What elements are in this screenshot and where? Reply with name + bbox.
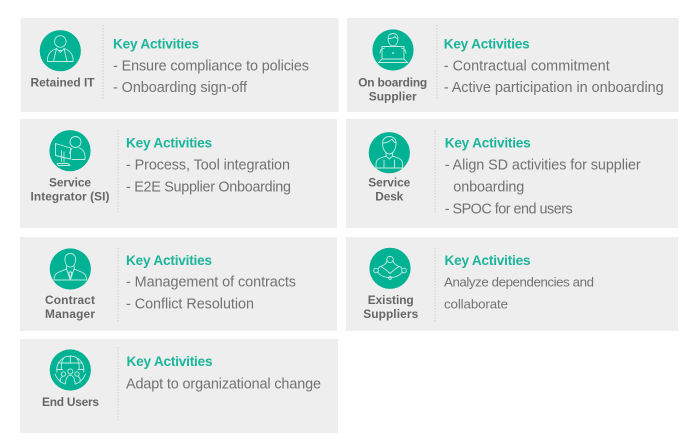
- icon: globe with users: [50, 349, 91, 391]
- label: Existing Suppliers: Suppliers: [363, 307, 419, 321]
- label: Service Integrator (SI): [30, 176, 110, 204]
- panel: Contract Manager: [20, 237, 337, 331]
- icon: person in suit: [50, 248, 91, 290]
- icon: retained IT person: [40, 30, 81, 71]
- text: activities: Analyze dependencies and: [444, 275, 594, 290]
- heading: Key Activities: Key Activities: [445, 135, 531, 150]
- label: Contract Manager: Manager: [45, 307, 95, 321]
- label: On boarding Supplier: Supplier: [369, 90, 417, 104]
- text: activities: - Contractual commitment: [444, 58, 610, 74]
- text: activities: - E2E Supplier Onboarding: [126, 179, 291, 195]
- label: Existing Suppliers: [363, 293, 419, 321]
- label: Service Desk: Desk: [375, 190, 404, 204]
- panel: On boarding Supplier: [347, 18, 678, 112]
- text: activities: [126, 275, 296, 312]
- text: activities: - Active participation in onboarding: [444, 80, 664, 96]
- text: activities: onboarding: [453, 179, 524, 195]
- label: Contract Manager: [45, 293, 95, 321]
- text: activities: [126, 158, 291, 195]
- panel: Service Integrator: [20, 119, 337, 228]
- text: activities: - Ensure compliance to policies: [113, 58, 309, 74]
- panel: Existing Suppliers: [346, 237, 678, 331]
- heading: Key Activities: Key Activities: [444, 253, 530, 268]
- panel: End Users: [20, 339, 338, 433]
- icon: service desk agent: [369, 132, 410, 173]
- heading: Key Activities: Key Activities: [126, 253, 212, 268]
- label: Contract Manager: Contract: [45, 293, 95, 307]
- icon: person with laptop: [372, 29, 414, 71]
- label: Service Desk: Service: [368, 176, 411, 190]
- text: activities: - Onboarding sign-off: [113, 80, 248, 96]
- icon: person at monitor: [49, 130, 91, 171]
- icon: connected supplier network: [369, 248, 411, 289]
- heading: Key Activities: Key Activities: [113, 36, 199, 51]
- text: activities: [445, 158, 641, 217]
- text: activities: [444, 275, 594, 311]
- text: activities: - SPOC for end users: [445, 201, 573, 217]
- text: activities: collaborate: [444, 296, 508, 311]
- panel: Retained IT: [20, 18, 338, 112]
- text: activities: - Conflict Resolution: [126, 296, 254, 312]
- label: On boarding Supplier: [358, 76, 427, 104]
- text: activities: - Process, Tool integration: [126, 158, 290, 174]
- text: activities: [113, 58, 309, 96]
- panel: Service Desk: [346, 119, 678, 228]
- text: activities: [444, 58, 664, 96]
- label: Retained IT: Retained IT: [30, 76, 95, 90]
- label: Service Integrator (SI): Integrator (SI): [30, 190, 110, 204]
- text: activities: - Management of contracts: [126, 275, 296, 291]
- label: End Users: End Users: [42, 395, 99, 409]
- label: Service Integrator (SI): Service: [49, 176, 91, 190]
- heading: Key Activities: Key Activities: [126, 135, 212, 150]
- label: Service Desk: [368, 176, 411, 204]
- text: activities: - Align SD activities for supplier: [445, 158, 641, 174]
- label: On boarding Supplier: On boarding: [358, 76, 427, 90]
- heading: Key Activities: Key Activities: [444, 36, 530, 51]
- label: Existing Suppliers: Existing: [368, 293, 414, 307]
- heading: Key Activities: Key Activities: [126, 354, 212, 369]
- text: activities: Adapt to organizational change: [126, 376, 321, 392]
